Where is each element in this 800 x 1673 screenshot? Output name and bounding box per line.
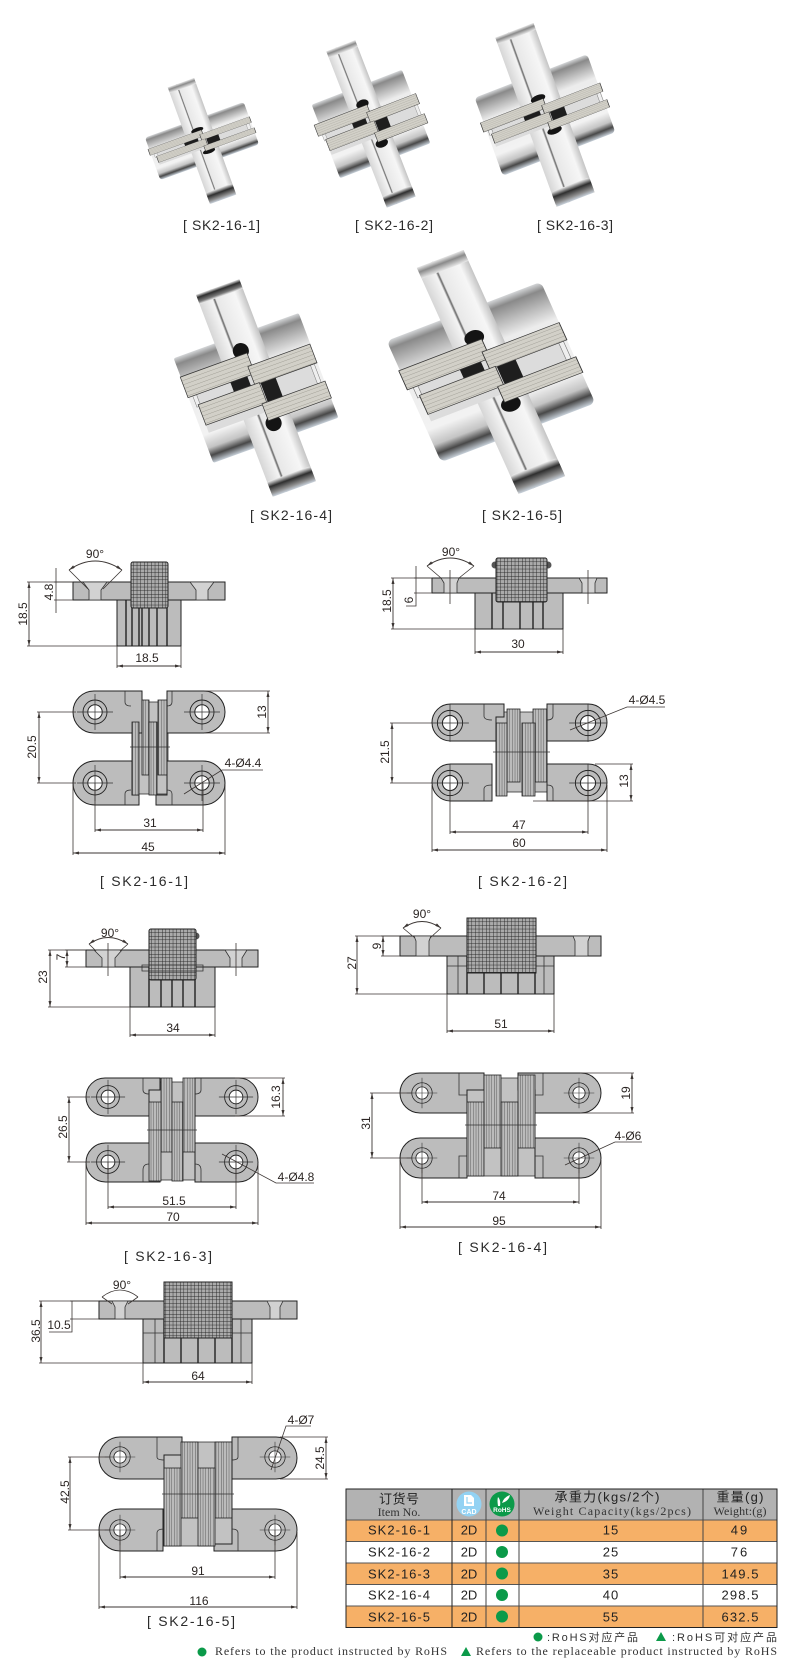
top view SK2-16-1 (73, 691, 225, 805)
dimension: 64 body width: 64 (191, 1369, 205, 1383)
dimension: 4.8 plate thickness: 4.8 (42, 583, 56, 600)
table rows: 35 (603, 1566, 619, 1582)
icon: CAD badge (456, 1492, 482, 1516)
dimension: 31 hole spacing: 31 (359, 1116, 373, 1130)
dimension: 19 arm width (580, 1073, 634, 1113)
label: SK2-16-4 drawing: [ SK2-16-4] (458, 1239, 547, 1255)
dimension: 18.5 body width: 18.5 (135, 651, 159, 665)
dimension: 36.5 height (29, 1301, 143, 1363)
dimension: hole callout 4-Ø4.5: 4-Ø4.5 (629, 693, 666, 707)
dimension: 91 hole span: 91 (191, 1564, 205, 1578)
table rows: 49 (731, 1522, 749, 1538)
dimension: 60 overall (432, 785, 607, 852)
table header: 订货号 (379, 1492, 419, 1506)
dimension: 51.5 hole span (108, 1162, 236, 1209)
dimension: 20.5 hole spacing (25, 712, 76, 783)
photo: hinge SK2-16-5 (362, 229, 620, 515)
dimension: 90 degree angle: 90° (86, 547, 104, 561)
dimension: hole callout 4-Ø7 (271, 1413, 315, 1470)
dimension: 42.5 hole spacing: 42.5 (58, 1480, 72, 1504)
dimension: 23 height: 23 (36, 970, 50, 984)
top view SK2-16-4 (400, 1073, 601, 1178)
side view SK2-16-5 (99, 1282, 297, 1363)
dimension: 26.5 hole spacing: 26.5 (56, 1115, 70, 1139)
dimension: 7 plate thickness: 7 (54, 953, 68, 960)
dimension: 6 plate thickness: 6 (402, 596, 416, 603)
dimension: 60 overall: 60 (512, 836, 526, 850)
dimension: 90 degree angle (403, 907, 441, 938)
dimension: 51.5 hole span: 51.5 (162, 1194, 186, 1208)
dimension: 13 arm width (205, 691, 270, 733)
dimension: 10.5 plate thickness (47, 1301, 99, 1332)
photo: hinge SK2-16-3 (455, 7, 635, 223)
dimension: 70 overall: 70 (166, 1210, 180, 1224)
photo: hinge SK2-16-2 (291, 27, 451, 221)
table header: Weight:(g) (714, 1504, 766, 1518)
dimension: 9 plate thickness (370, 936, 400, 956)
table header: 重量(g) (716, 1490, 764, 1504)
icon: RoHS badge (490, 1492, 514, 1516)
table header: Weight Capacity(kgs/2pcs) (533, 1504, 691, 1518)
top view SK2-16-2 (431, 704, 607, 802)
dimension: 23 height (36, 950, 130, 1007)
dimension: 47 hole span (450, 783, 588, 834)
dimension: 18.5 height (380, 578, 475, 629)
dimension: hole callout 4-Ø4.5 (570, 693, 666, 730)
legend: RoHS notes (198, 1630, 777, 1658)
dimension: 13 arm width: 13 (255, 705, 269, 719)
dimension: 90 degree angle (427, 545, 474, 578)
dimension: 42.5 hole spacing (58, 1457, 110, 1530)
dimension: 70 overall (86, 1164, 258, 1225)
top view SK2-16-5 (99, 1437, 297, 1551)
table rows: 2D (461, 1544, 477, 1560)
table rows: 2D (461, 1588, 477, 1602)
label: SK2-16-5 drawing: [ SK2-16-5] (147, 1613, 235, 1629)
top view SK2-16-3 (86, 1078, 258, 1182)
table rows: 298.5 (722, 1588, 758, 1602)
dimension: 30 body width: 30 (511, 637, 525, 651)
table: item specifications (346, 1489, 777, 1628)
label: SK2-16-3 photo: [ SK2-16-3] (537, 217, 613, 233)
dimension: 51 body width (447, 994, 554, 1033)
legend: RoHS notes: :RoHS对应产品 (547, 1630, 638, 1644)
dimension: 47 hole span: 47 (512, 818, 526, 832)
dimension: 16.3 arm width (235, 1078, 285, 1116)
panel: drawing SK2-16-5 (29, 1278, 328, 1629)
icon: RoHS badge: RoHS (493, 1507, 512, 1514)
photo: hinge SK2-16-4 (155, 264, 357, 512)
dimension: hole callout 4-Ø4.4: 4-Ø4.4 (225, 756, 262, 770)
table rows: 2D (461, 1566, 477, 1582)
dimension: 90 degree angle (69, 547, 122, 589)
table rows: SK2-16-1 (368, 1522, 430, 1538)
dimension: 16.3 arm width: 16.3 (269, 1085, 283, 1109)
side view SK2-16-4 (400, 918, 601, 994)
dimension: 26.5 hole spacing (56, 1097, 90, 1162)
panel: drawing SK2-16-2 (378, 545, 666, 889)
dimension: 31 hole span (95, 783, 203, 832)
side view SK2-16-2 (432, 558, 607, 629)
dimension: 20.5 hole spacing: 20.5 (25, 735, 39, 759)
label: SK2-16-4 photo: [ SK2-16-4] (250, 507, 332, 523)
table header: Item No. (378, 1505, 420, 1519)
dimension: 45 overall (73, 785, 225, 855)
table rows: SK2-16-5 (368, 1610, 430, 1624)
legend: RoHS notes: Refers to the product instructed by RoHS (215, 1644, 447, 1658)
dimension: hole callout 4-Ø4.8: 4-Ø4.8 (278, 1170, 315, 1184)
dimension: 31 hole span: 31 (143, 816, 157, 830)
dimension: 74 hole span: 74 (492, 1189, 506, 1203)
dimension: 7 plate thickness (54, 950, 86, 967)
side view SK2-16-3 (86, 929, 258, 1007)
dimension: 90 degree angle: 90° (442, 545, 460, 559)
label: SK2-16-2 photo: [ SK2-16-2] (355, 217, 433, 233)
dimension: 18.5 body width (117, 646, 181, 668)
table rows: 2D (461, 1610, 477, 1624)
dimension: 27 height (345, 936, 447, 994)
dimension: 21.5 hole spacing (378, 723, 432, 783)
dimension: 6 plate thickness (402, 566, 432, 606)
dimension: 45 overall: 45 (141, 840, 155, 854)
table rows (346, 1489, 777, 1628)
dimension: hole callout 4-Ø4.4 (184, 756, 263, 794)
dimension: 36.5 height: 36.5 (29, 1319, 43, 1343)
dimension: 116 overall (99, 1532, 297, 1609)
table header (346, 1489, 777, 1520)
side view SK2-16-1 (73, 562, 225, 646)
dimension: 95 overall: 95 (492, 1214, 506, 1228)
dimension: 18.5 height (16, 582, 117, 646)
dimension: 116 overall: 116 (189, 1594, 209, 1608)
dimension: 34 body width: 34 (166, 1021, 180, 1035)
panel: drawing SK2-16-4 (345, 907, 642, 1255)
dimension: 51 body width: 51 (494, 1017, 508, 1031)
dimension: 18.5 height: 18.5 (380, 589, 394, 613)
legend: RoHS notes: :RoHS可对应产品 (672, 1630, 777, 1644)
dimension: 13 arm width (533, 764, 633, 801)
table rows: SK2-16-2 (368, 1544, 430, 1560)
table rows: 25 (603, 1544, 619, 1560)
label: SK2-16-3 drawing: [ SK2-16-3] (124, 1248, 212, 1264)
dimension: 90 degree angle (89, 926, 128, 951)
table rows: 55 (603, 1610, 619, 1624)
table rows: 149.5 (722, 1566, 758, 1582)
dimension: 19 arm width: 19 (619, 1086, 633, 1100)
table rows: SK2-16-3 (368, 1566, 430, 1582)
dimension: 91 hole span (120, 1530, 275, 1579)
dimension: 9 plate thickness: 9 (370, 942, 384, 949)
panel: drawing SK2-16-3 (36, 926, 315, 1264)
table rows: 40 (603, 1588, 619, 1602)
dimension: hole callout 4-Ø6 (565, 1129, 642, 1165)
label: SK2-16-1 photo: [ SK2-16-1] (183, 217, 260, 233)
dimension: 90 degree angle: 90° (101, 926, 119, 940)
table rows: 632.5 (722, 1610, 758, 1624)
table rows: 2D (461, 1522, 477, 1538)
table rows: 76 (731, 1544, 749, 1560)
dimension: 31 hole spacing (359, 1093, 412, 1158)
photo: hinge SK2-16-1 (131, 64, 273, 218)
dimension: 64 body width (143, 1363, 252, 1384)
dimension: 13 arm width: 13 (617, 774, 631, 788)
table rows: 15 (603, 1522, 619, 1538)
icon: CAD badge: CAD (461, 1509, 477, 1516)
table header: 承重力(kgs/2个) (554, 1490, 660, 1504)
dimension: 21.5 hole spacing: 21.5 (378, 740, 392, 764)
dimension: 18.5 height: 18.5 (16, 602, 30, 626)
dimension: 90 degree angle: 90° (413, 907, 431, 921)
dimension: 90 degree angle (102, 1278, 138, 1304)
dimension: 34 body width (130, 1007, 215, 1037)
dimension: hole callout 4-Ø4.8 (222, 1154, 315, 1184)
label: SK2-16-1 drawing: [ SK2-16-1] (100, 873, 188, 889)
dimension: 4.8 plate thickness (42, 568, 73, 613)
table rows: SK2-16-4 (368, 1588, 430, 1602)
dimension: hole callout 4-Ø6: 4-Ø6 (615, 1129, 642, 1143)
dimension: 24.5 arm width: 24.5 (313, 1446, 327, 1470)
dimension: 30 body width (475, 629, 563, 654)
dimension: 95 overall (400, 1160, 601, 1229)
dimension: 10.5 plate thickness: 10.5 (47, 1318, 71, 1332)
panel: drawing SK2-16-1 (16, 547, 270, 889)
dimension: 74 hole span (422, 1158, 579, 1204)
dimension: hole callout 4-Ø7: 4-Ø7 (288, 1413, 315, 1427)
label: SK2-16-5 photo: [ SK2-16-5] (482, 507, 562, 523)
dimension: 27 height: 27 (345, 956, 359, 970)
dimension: 90 degree angle: 90° (113, 1278, 131, 1292)
legend: RoHS notes: Refers to the replaceable product instructed by RoHS (476, 1644, 777, 1658)
label: SK2-16-2 drawing: [ SK2-16-2] (478, 873, 567, 889)
dimension: 24.5 arm width (280, 1437, 328, 1479)
